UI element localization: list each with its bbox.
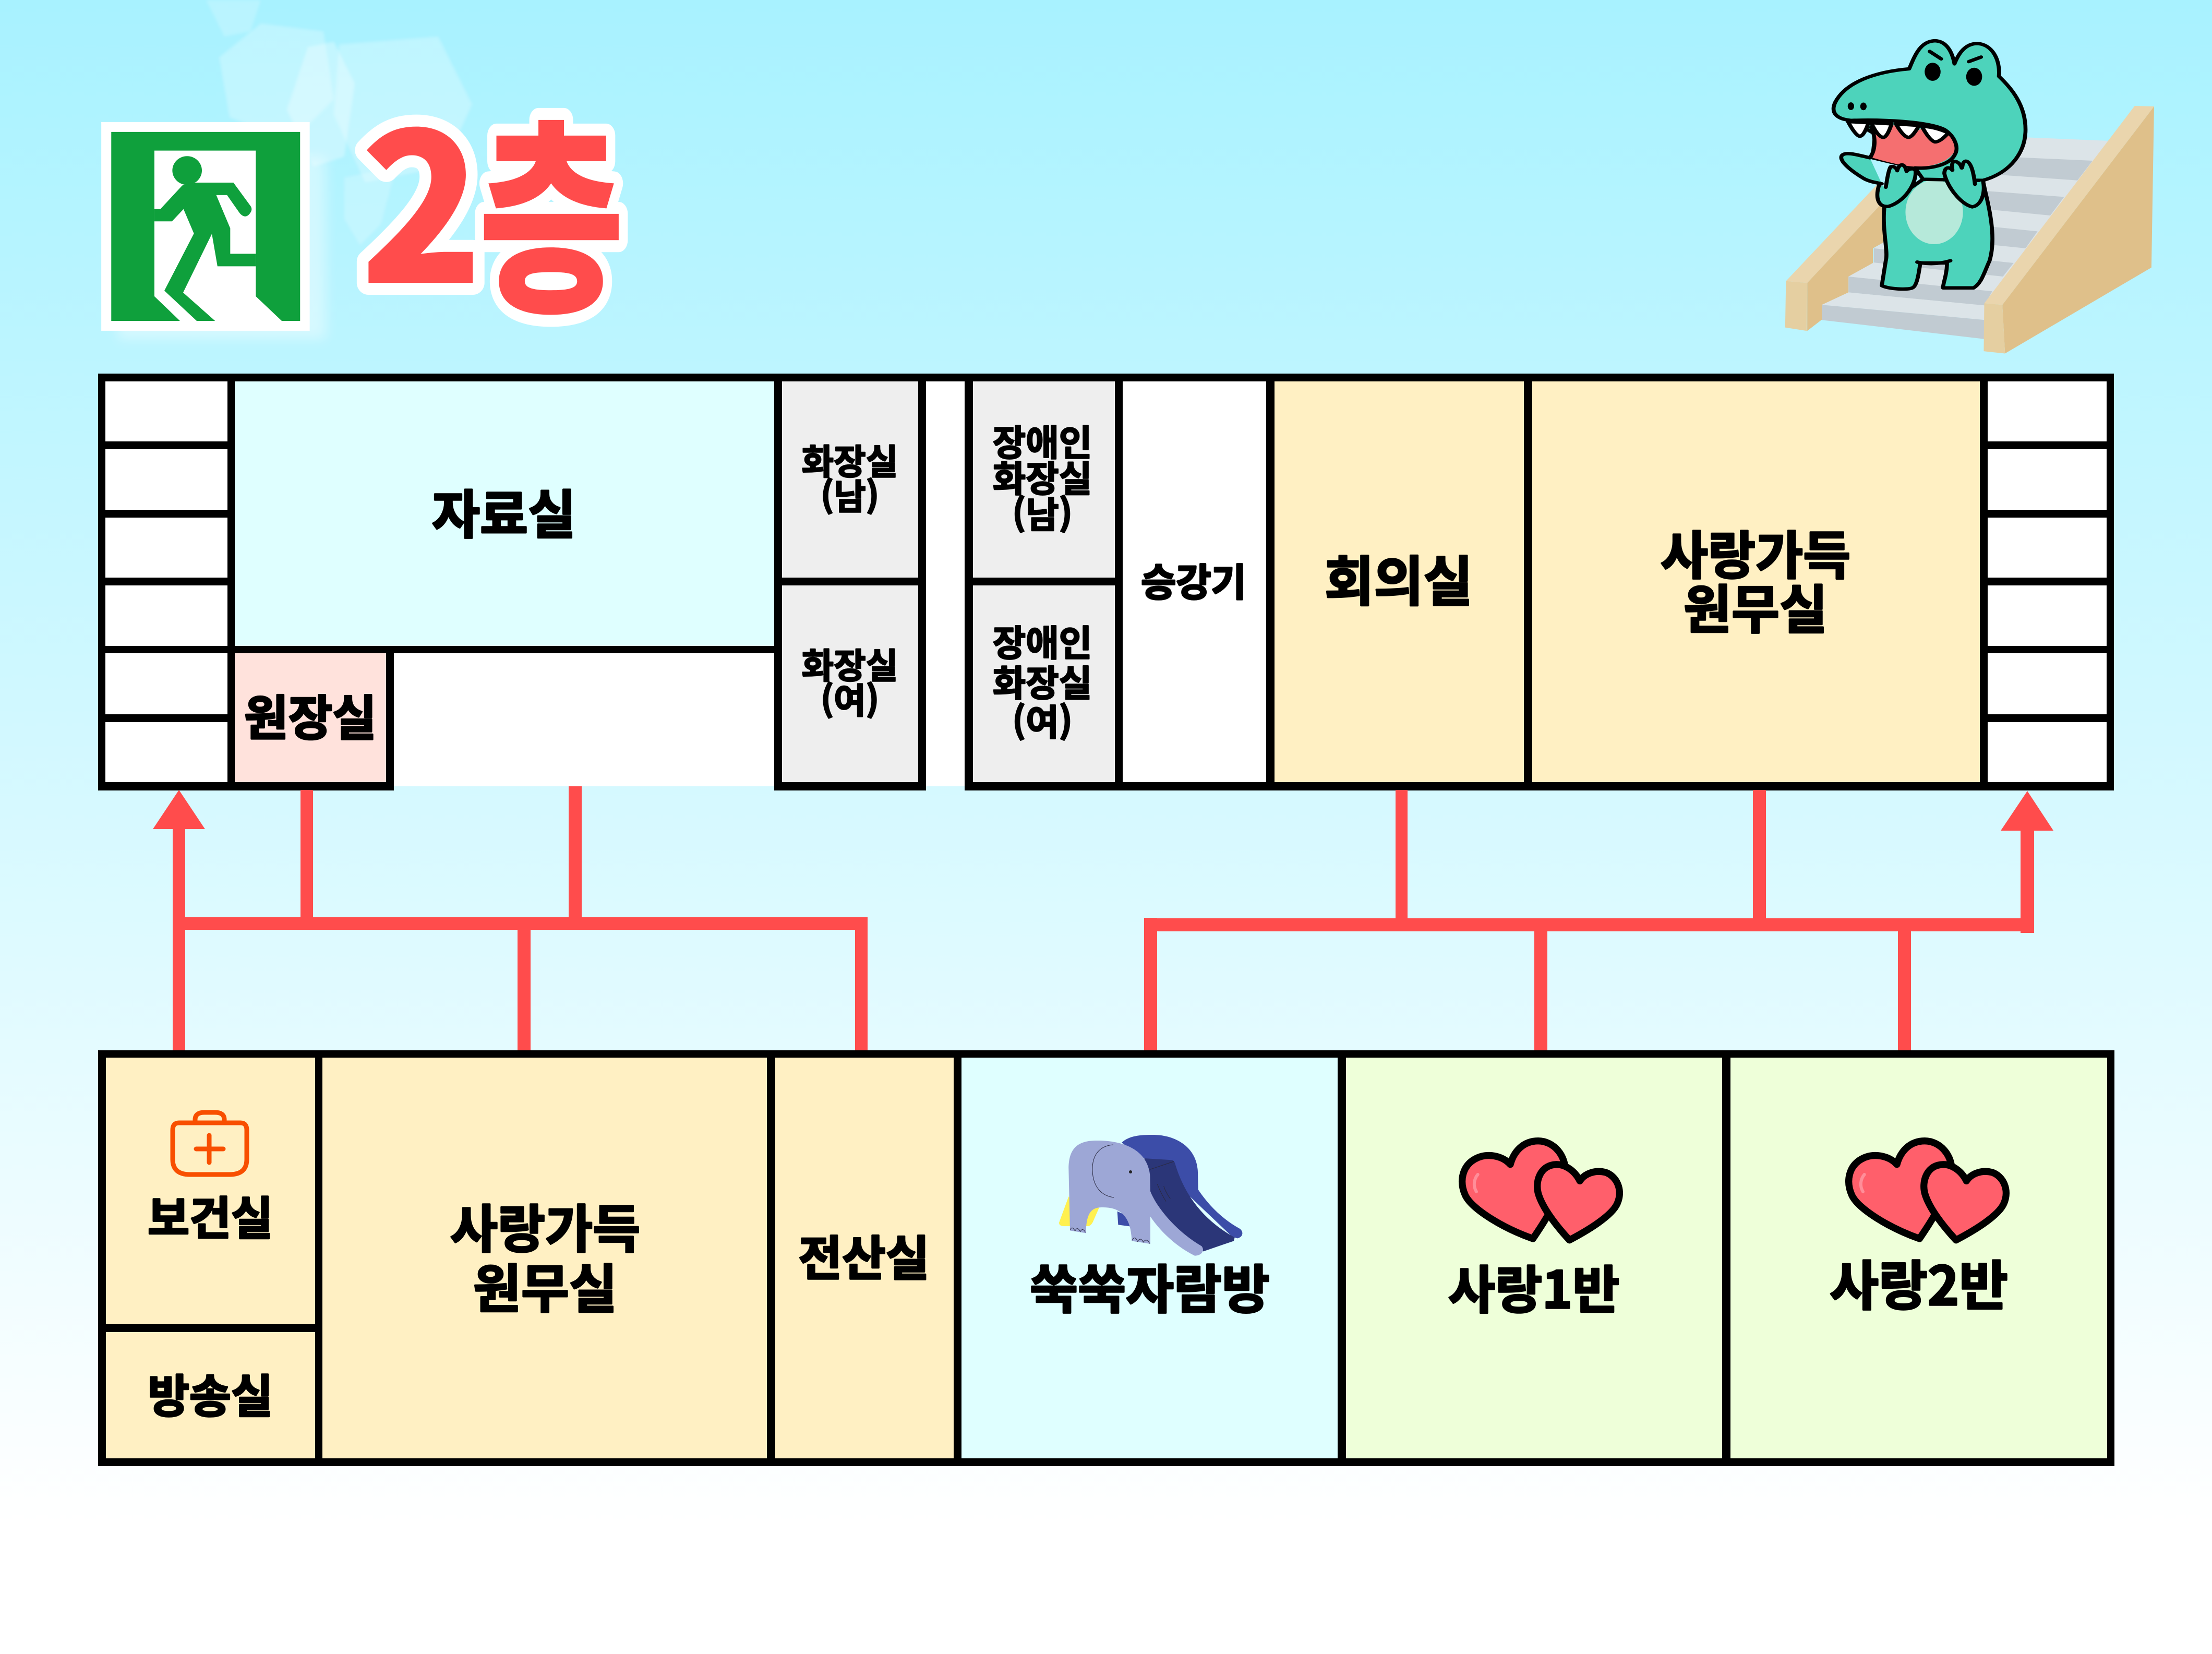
room: 장애인 화장실 (여): (여)	[1012, 693, 1073, 746]
room: 승강기	[1123, 381, 1266, 782]
room: 화장실 (남)	[782, 381, 918, 578]
room: 회의실	[1275, 381, 1524, 782]
upper floor walls	[98, 374, 2114, 790]
room: 사랑2반	[1730, 1058, 2107, 1458]
room: 사랑가득 원무실 lower	[322, 1058, 767, 1458]
room: 장애인 화장실 (여)	[973, 585, 1115, 782]
stairwell: right	[1988, 381, 2107, 782]
room: 장애인 화장실 (남): (남)	[1012, 486, 1073, 538]
room: 사랑1반: 사랑1반	[1448, 1249, 1619, 1323]
room: 화장실 (남): (남)	[821, 469, 879, 520]
room: 방송실: 방송실	[148, 1360, 273, 1426]
corridor: gap	[926, 381, 965, 786]
room: 사랑2반: 사랑2반	[1830, 1244, 2008, 1321]
room: 장애인 화장실 (남): 화장실	[993, 450, 1092, 502]
room: 회의실: 회의실	[1325, 538, 1473, 616]
room: 자료실: 자료실	[432, 473, 576, 548]
room: 화장실 (여): (여)	[821, 673, 879, 724]
room: 전산실: 전산실	[798, 1220, 930, 1289]
room: 화장실 (여)	[782, 585, 918, 782]
room: 사랑가득 원무실 upper: 원무실	[1684, 568, 1828, 643]
room: 장애인 화장실 (남): 장애인	[993, 414, 1092, 466]
lower floor walls	[98, 1050, 2114, 1466]
room: 화장실 (남): 화장실	[802, 434, 898, 485]
title: 2층: 2	[360, 43, 483, 342]
room: 사랑가득 원무실 upper: 사랑가득	[1661, 514, 1850, 589]
room: 사랑1반	[1346, 1058, 1722, 1458]
icon: crocodile on stairs	[1785, 39, 2154, 354]
room: 전산실	[775, 1058, 954, 1458]
room: 장애인 화장실 (남)	[973, 381, 1115, 578]
room: 장애인 화장실 (여): 화장실	[993, 654, 1092, 706]
arrows: right evacuation route	[1144, 790, 2053, 1050]
room: 승강기: 승강기	[1141, 552, 1246, 607]
room: 자료실	[235, 381, 774, 646]
room: 원장실: 원장실	[244, 680, 377, 749]
room: 사랑가득 원무실 lower: 사랑가득	[450, 1188, 640, 1263]
room: 보건실: 보건실	[148, 1182, 273, 1248]
icon: hearts	[1462, 1141, 1619, 1240]
panel: upper floor plan	[98, 374, 2114, 790]
panel: lower floor plan	[98, 1050, 2114, 1466]
icon: elephant slide	[1059, 1135, 1242, 1256]
room: 장애인 화장실 (여): 장애인	[993, 614, 1092, 666]
room: 사랑가득 원무실 upper	[1532, 381, 1980, 782]
room: 보건실	[106, 1058, 315, 1324]
room: 쑥쑥자람방	[961, 1058, 1338, 1458]
icon: hearts	[1849, 1141, 2006, 1240]
icon: emergency exit sign	[101, 122, 310, 331]
room: 사랑가득 원무실 lower: 원무실	[473, 1247, 617, 1323]
room: 방송실	[106, 1332, 315, 1458]
title: 2층	[360, 43, 624, 355]
arrows: left evacuation route	[153, 786, 868, 1050]
room: 쑥쑥자람방: 쑥쑥자람방	[1030, 1248, 1270, 1323]
stairwell: left	[105, 381, 227, 782]
corridor: lower white space	[394, 653, 774, 786]
title: 2층: 층	[478, 53, 624, 355]
icon: first aid kit	[173, 1112, 247, 1174]
room: 원장실	[235, 653, 386, 782]
room: 화장실 (여): 화장실	[802, 638, 898, 689]
